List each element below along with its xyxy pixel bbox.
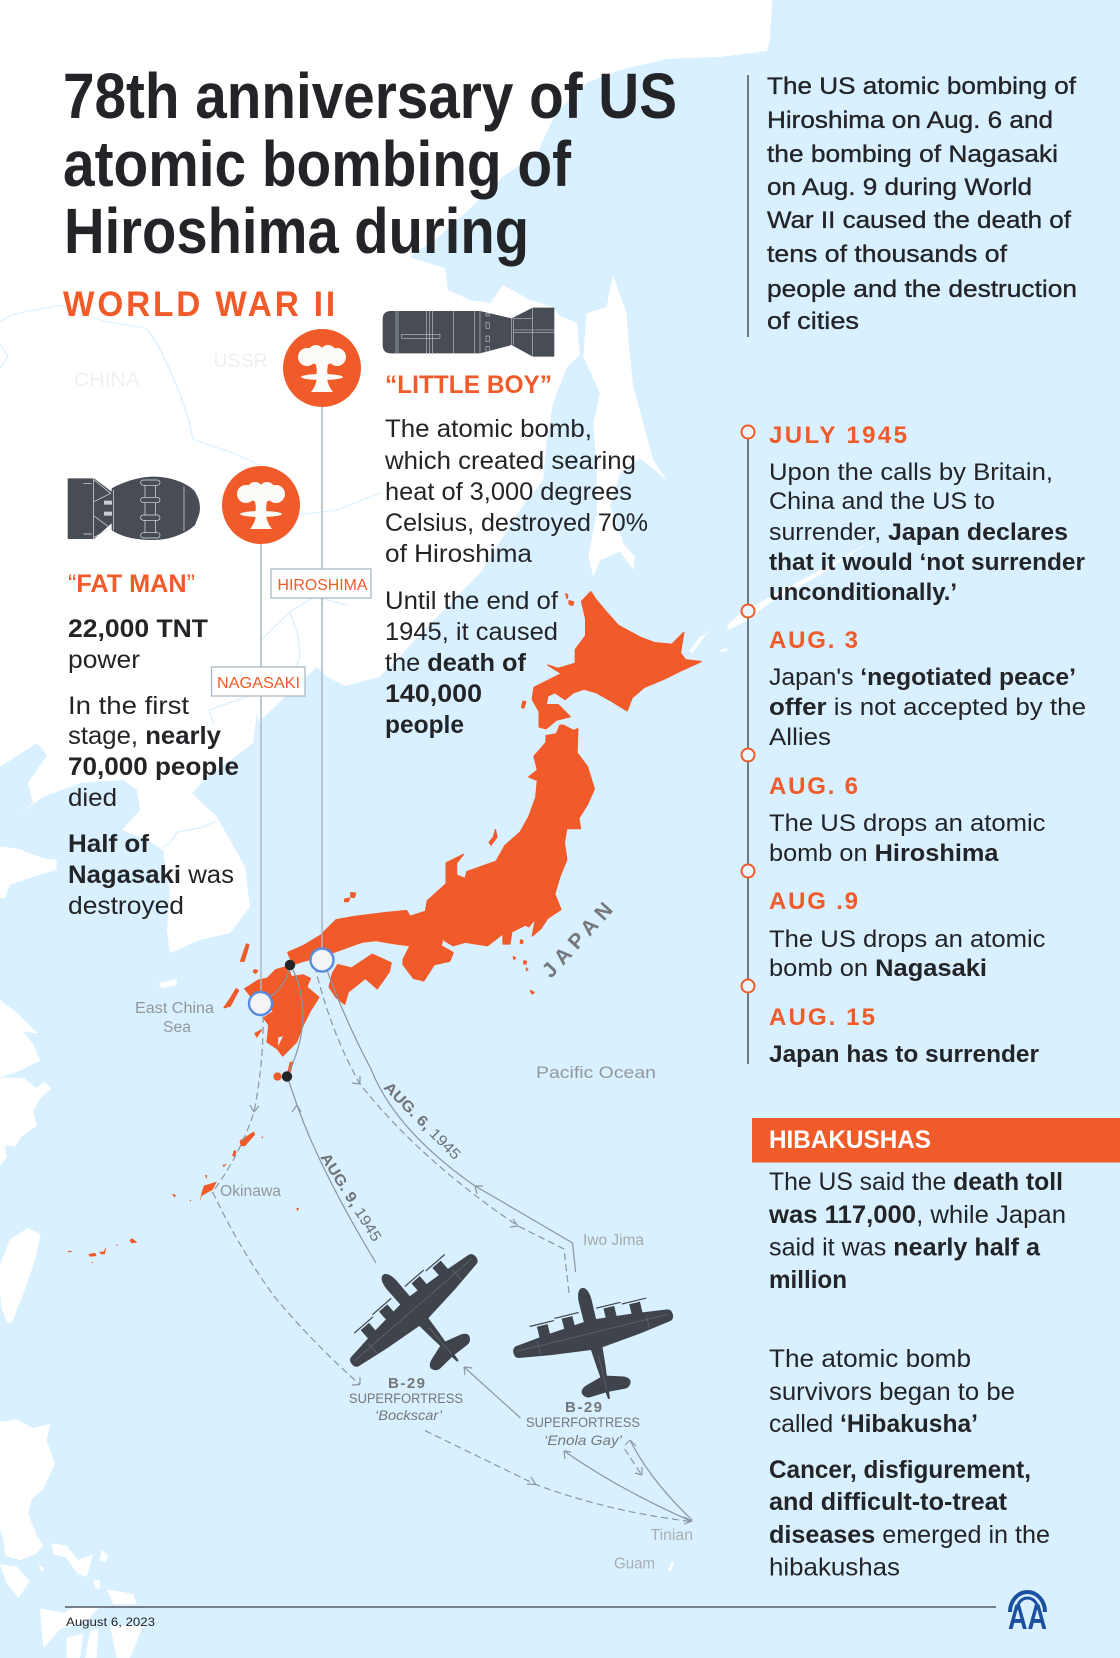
text: Fat Man destruction: Half of	[68, 830, 150, 858]
icon: mushroom cloud, Fat Man	[222, 466, 300, 544]
map labels: country names: CHINA	[74, 370, 140, 391]
label: Hiroshima	[271, 569, 371, 598]
timeline: Aug. 3: Japan's ‘negotiated peace’	[769, 664, 1076, 691]
marker: Hiroshima bomb site	[310, 948, 334, 972]
timeline: July 1945: China and the US to	[769, 488, 995, 515]
icon: B-29 Enola Gay	[502, 1269, 689, 1418]
timeline: Aug. 3: AUG. 3	[769, 627, 858, 654]
footer rule	[65, 1606, 996, 1608]
text: death toll	[768, 1168, 1066, 1294]
map: borders on land	[0, 305, 381, 847]
panel: timeline	[742, 422, 1086, 1068]
text: Little Boy description: heat of 3,000 degrees	[385, 478, 632, 506]
label: Nagasaki: NAGASAKI	[217, 675, 300, 692]
Shikoku	[329, 954, 391, 1004]
label: Bockscar: ‘Bockscar’	[375, 1407, 443, 1423]
timeline: July 1945	[769, 422, 1085, 606]
marker: Yakushima waypoint	[282, 1071, 292, 1082]
timeline: July 1945: surrender, Japan declares	[769, 519, 1068, 546]
text: diseases	[769, 1456, 1050, 1582]
text: Fat Man death toll: 70,000 people	[68, 753, 239, 781]
icon: Little Boy bomb	[383, 308, 554, 357]
timeline: Aug. 6: AUG. 6	[769, 773, 858, 800]
timeline: July 1945: unconditionally.’	[769, 579, 957, 606]
intro paragraph: War II caused the death of	[767, 207, 1071, 234]
label: Enola Gay: SUPERFORTRESS	[526, 1415, 640, 1430]
text: Little Boy description: which created searing	[384, 447, 636, 475]
intro paragraph: the bombing of Nagasaki	[767, 141, 1058, 168]
map labels: seas and islands: Pacific Ocean	[536, 1063, 656, 1082]
timeline: Aug. 15	[769, 1004, 1039, 1068]
label: Enola Gay: ‘Enola Gay’	[544, 1432, 623, 1448]
intro paragraph	[748, 73, 1077, 337]
icon: AA logo	[1008, 1592, 1047, 1637]
text: Little Boy description	[384, 415, 648, 568]
Hokkaido	[532, 592, 701, 729]
timeline: Aug. 3	[769, 627, 1086, 751]
map: Japan in orange	[68, 592, 701, 1264]
title: atomic bombing of	[63, 128, 572, 200]
text: Fat Man destruction: destroyed	[68, 892, 184, 920]
heading: Fat Man: “FAT MAN”	[68, 570, 195, 598]
timeline markers	[742, 426, 754, 992]
timeline: July 1945: JULY 1945	[769, 422, 907, 449]
label: Bockscar: B-29	[388, 1375, 425, 1392]
text: survivors	[769, 1345, 1015, 1438]
text: Fat Man destruction	[68, 830, 234, 920]
text: survivors: The atomic bomb	[769, 1345, 971, 1373]
text: survivors: called ‘Hibakusha’	[769, 1410, 978, 1438]
text: Little Boy death toll: people	[385, 711, 464, 739]
map labels: seas and islands: Guam	[614, 1556, 655, 1572]
text: Little Boy death toll	[385, 587, 558, 739]
title: 78th anniversary of US	[63, 60, 677, 132]
text: death toll: million	[769, 1266, 847, 1294]
map labels: country names: USSR	[214, 351, 268, 372]
text: diseases: hibakushas	[769, 1554, 900, 1582]
map labels: seas and islands: Sea	[163, 1019, 191, 1036]
text: Fat Man power	[68, 615, 208, 674]
text: Little Boy death toll: Until the end of	[385, 587, 558, 615]
intro paragraph: people and the destruction	[767, 276, 1077, 303]
panel: Hibakushas	[752, 1118, 1120, 1582]
map labels: country names	[74, 351, 268, 391]
text: Fat Man death toll: In the first	[68, 692, 189, 720]
timeline: Aug. 15: AUG. 15	[769, 1004, 875, 1031]
leader lines to bomb sites	[261, 407, 322, 993]
text: diseases: diseases emerged in the	[769, 1521, 1050, 1549]
intro paragraph: The US atomic bombing of	[767, 73, 1076, 100]
timeline: Aug. 6: bomb on Hiroshima	[769, 840, 999, 867]
timeline: Aug. 9: AUG .9	[769, 888, 858, 915]
date: August 6, 2023	[66, 1615, 155, 1629]
intro paragraph: on Aug. 9 during World	[767, 174, 1032, 201]
route label: Aug. 6, 1945: AUG. 6, 1945	[380, 1079, 464, 1163]
timeline: Aug. 9: bomb on Nagasaki	[769, 955, 987, 982]
label: Bockscar	[349, 1375, 463, 1423]
route label: Aug. 9, 1945: AUG. 9, 1945	[317, 1150, 385, 1245]
text: Fat Man death toll: stage, nearly	[68, 722, 221, 750]
text: Little Boy death toll: 140,000	[385, 680, 482, 708]
text: death toll: was 117,000, while Japan	[768, 1201, 1066, 1229]
map labels: seas and islands: Iwo Jima	[583, 1232, 644, 1249]
map: land masses	[0, 0, 868, 1658]
timeline: July 1945: that it would ‘not surrender	[769, 549, 1085, 576]
icon: B-29 Bockscar	[321, 1221, 520, 1415]
timeline: Aug. 3: offer is not accepted by the	[769, 694, 1086, 721]
flight paths	[213, 965, 692, 1524]
subtitle: World War II: WORLD WAR II	[63, 285, 338, 324]
map labels: seas and islands: Okinawa	[220, 1183, 281, 1200]
label: Hiroshima: HIROSHIMA	[278, 577, 368, 594]
text: Fat Man power: 22,000 TNT	[68, 615, 208, 643]
timeline: July 1945: Upon the calls by Britain,	[769, 459, 1053, 486]
map labels: seas and islands	[135, 1000, 693, 1572]
text: death toll: The US said the death toll	[769, 1168, 1063, 1196]
intro paragraph: tens of thousands of	[767, 241, 1007, 268]
Kyushu	[245, 966, 319, 1056]
title: Hiroshima during	[64, 195, 529, 267]
text: Fat Man death toll	[68, 692, 239, 812]
text: Little Boy description: The atomic bomb,	[385, 415, 592, 443]
heading: Hibakushas	[752, 1118, 1120, 1162]
small islands	[489, 830, 497, 845]
intro paragraph: of cities	[767, 308, 859, 335]
text: diseases: and difficult-to-treat	[769, 1488, 1008, 1516]
heading: Little Boy: “LITTLE BOY”	[385, 371, 552, 399]
label: Bockscar: SUPERFORTRESS	[349, 1391, 463, 1406]
text: death toll: said it was nearly half a	[769, 1234, 1041, 1262]
marker: Nagasaki bomb site	[249, 992, 272, 1015]
text: diseases: Cancer, disfigurement,	[769, 1456, 1031, 1484]
icon: Fat Man bomb	[68, 477, 200, 540]
timeline: Aug. 9: The US drops an atomic	[769, 926, 1046, 953]
marker: Kokura waypoint	[285, 960, 295, 970]
label: Enola Gay	[526, 1399, 640, 1448]
text: Fat Man power: power	[68, 646, 140, 674]
map labels: seas and islands: Tinian	[650, 1527, 693, 1544]
label: Enola Gay: B-29	[565, 1399, 602, 1416]
text: Little Boy death toll: the death of	[385, 649, 527, 677]
text: Little Boy description: of Hiroshima	[385, 540, 532, 568]
icon: AA logo: AA	[1008, 1598, 1047, 1637]
text: survivors: survivors began to be	[769, 1378, 1015, 1406]
panel: Little Boy	[384, 371, 648, 739]
panel: Fat Man	[68, 570, 239, 920]
title	[63, 60, 677, 267]
timeline: Aug. 9	[769, 888, 1046, 982]
intro paragraph: Hiroshima on Aug. 6 and	[767, 107, 1053, 134]
map labels: seas and islands: East China	[135, 1000, 214, 1017]
timeline: Aug. 3: Allies	[769, 724, 831, 751]
timeline: Aug. 6: The US drops an atomic	[769, 810, 1046, 837]
timeline: Aug. 15: Japan has to surrender	[769, 1041, 1039, 1068]
Honshu	[288, 725, 594, 981]
text: Little Boy death toll: 1945, it caused	[385, 618, 558, 646]
label: Nagasaki	[212, 667, 305, 696]
text: Little Boy description: Celsius, destroyed 70%	[385, 509, 648, 537]
text: Fat Man destruction: Nagasaki was	[68, 861, 234, 889]
text: Fat Man death toll: died	[68, 784, 117, 812]
timeline: Aug. 6	[769, 773, 1046, 867]
heading: Hibakushas: HIBAKUSHAS	[769, 1126, 931, 1154]
map label: Japan: JAPAN	[538, 898, 618, 982]
icon: mushroom cloud, Little Boy	[283, 329, 361, 407]
